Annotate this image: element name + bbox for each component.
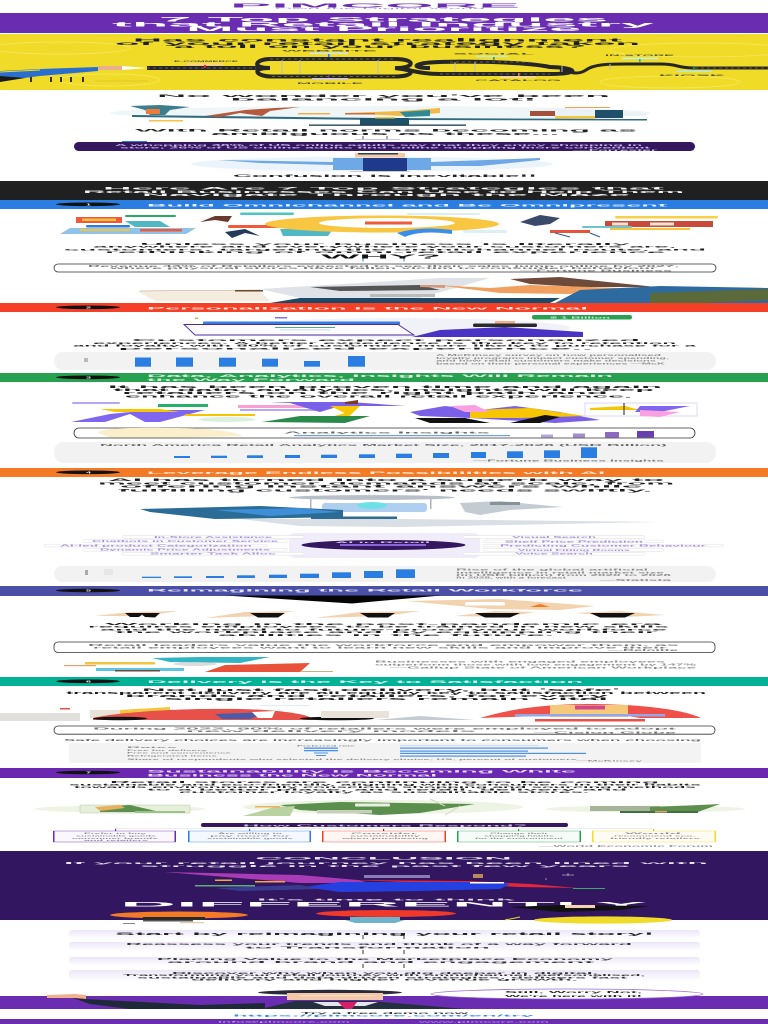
panel: personalization bar chart [54,352,716,370]
text: AI intro: fulfilling customers' needs swiftly. [118,488,652,492]
section header 7: Business the New Normal [147,773,438,777]
illustration: analytics people [71,400,697,423]
card: green [457,829,581,842]
text: personalization intro: personalized experience.. [118,346,595,350]
text: AI intro: AI has turned into a superb way to [108,478,664,482]
illustration: retail workforce [95,596,665,618]
card: red: sustainability [350,834,424,838]
road marker labels: WEBSITE [282,50,384,52]
section header 3 [0,373,768,382]
speech bubble: Still, Worry Not, [505,990,644,994]
title banner [0,13,768,33]
text: personalization intro: experiences. A better experience is the key to retention [93,341,677,345]
panel: delivery preference table: Refrigerated items [127,754,221,758]
text: chart note: A McKinsey survey on how personalised [436,354,664,357]
panel: delivery preference table: Share of respondents who selected the delivery choice, US, percent of customers [127,758,581,761]
text: delivery intro [66,688,706,701]
panel: AI applications list: Smarter Task Alloc [150,553,280,556]
banner: strategies intro: Navigate Through the Maze [142,193,630,197]
heading: conclusion: CONCLUSION [255,857,516,861]
panel: AI applications list: In-Store Assistance [154,536,276,539]
text: workforce intro: requires employees to be trained in new skills [88,625,672,629]
panel: AI applications list: AI-led product Categorization [60,544,255,548]
footer bar [0,1019,768,1024]
callout: why stat box: where physical stores have fallen victim to consumer behaviour [110,267,657,270]
road marker labels: CATALOG [475,79,565,82]
text: chart note: loyalty programs impact customer spending, [436,357,671,360]
heading: balancing a lot: balancing a lot! [230,98,537,102]
text: ambiguous norms [135,128,637,140]
panel: AI applications list: AI in Retail [335,541,433,544]
step 4 text: delivery and higher revenue growth. [191,978,581,982]
panel: delivery preference table [69,743,701,763]
illustration: laptop and person [137,277,768,303]
step 2 text: to Transformation [245,945,494,949]
road chart [147,59,768,76]
source: WEF: —World Economic Forum [539,844,717,848]
callout: workforce stat box: retail employees want to learn new skills and improve their [93,646,667,650]
text: sustainability intro: to a better place, and retail, delivery and [147,787,630,791]
callout: delivery stat box: new delivery models [186,730,483,733]
callout: Forrester stat pill [74,141,695,152]
card: yellow [592,829,716,842]
text: omnichannel intro: Unless your business is literally [140,242,633,246]
heading: think differently [120,898,656,908]
text: sustainability intro: Retail stores are continuing to be coming [110,780,663,784]
illustration: employee collage [64,657,333,672]
illustration: delivery car and person [0,704,701,722]
illustration: figures lower edge [123,920,405,924]
text: workforce intro [88,622,672,637]
card: red [322,829,446,842]
heading: think differently: DIFFERENTLY [120,901,656,908]
text: confusion: Confusion is inevitable!! [233,174,537,178]
panel: AI applications list: Voice Search [515,554,596,556]
card: blue: Are willing to [218,832,285,835]
section header 6 [0,677,768,686]
panel: delivery preference table: Rates [127,746,183,749]
text: AI chart note [456,568,675,582]
section header 1: 1 [86,202,92,206]
speech bubble [431,989,703,999]
card: purple: Prefer to buy [84,832,150,835]
heading: WHY: WHY? [321,254,441,260]
text: workforce intro: and the need to future-proof your workforce [100,627,670,631]
section header 3: 3 [86,376,92,380]
callout: analytics box [74,428,695,438]
text: personalization intro: and loyalty, with 80% of customers more likely to purchase for a [73,344,698,348]
step 3 text: around brand and engagement [167,960,596,964]
card: red: Consider [351,833,418,835]
stat cards [53,829,716,842]
step 3 text: Placing Value to the Marketplace Economy [157,957,618,961]
logo [230,4,528,10]
illustration: AI platform and robot [140,495,660,527]
callout: why stat box: Revenue 43% of Retailers expected to see their sales jump online by 2027, [88,265,681,268]
text: sustainability intro: sustainable and eco-friendly, aligning with consumers in their habits [69,782,705,786]
heading: realignment question: a toll on your business? [174,44,589,49]
panel: AI applications list: Shelf Price Prediction [505,540,646,543]
text: workforce intro: the workplace and by equipping their [115,630,665,634]
heading: realignment question: Has constant realignment [133,38,627,42]
title banner: Must Prioritize [186,27,587,33]
section header 7: 7 [86,771,92,775]
text: sustainability intro: customer loyalty as sustainable stores. [179,790,591,794]
text: free demo call to action: Try a free demo now [301,1012,469,1015]
title banner: that Retail Industry [112,22,661,28]
illustration: personalization laptop: $ 1 Billion [550,317,613,320]
callout: why stat box: —Fortune Business [520,270,676,272]
heading: realignment question [115,38,643,49]
text: chart note [436,354,671,366]
callout: workforce stat box: Retail leaders value the workforce and empower them, as [88,644,684,647]
step 3 text [157,957,618,964]
section header 3: the Way Forward [147,378,355,382]
callout: delivery stat box: During 2022, 90% of retailers were employed to adopt [93,727,677,730]
text: analytics intro: that data, analytics, insights will keep [113,388,654,392]
text: AI intro: meet customer demands at scale, from [98,482,674,486]
panel: AI applications list: Predicting Customer Behaviour [500,544,707,548]
heading pill: how customers respond [115,823,652,828]
text: workforce source: Businesses with engaged employees [375,660,668,664]
text: analytics intro: retailers on the right path and [122,391,608,395]
panel: retail strategy road on yellow [0,34,768,90]
footer band with manager [0,990,768,1009]
callout: why stat box [54,264,716,272]
panel: delivery preference table: Preferred rate [297,744,358,748]
section header 7: Sustainability is Becoming White [147,770,577,774]
text: personalization intro: Customers expect personalized [132,338,642,342]
text: AI intro: offering instant answers while [120,485,643,489]
section header 1: Build Omnichannel and Be Omnipresent [147,204,672,208]
card: red: when purchasing [342,838,431,840]
card: green: Change their [490,832,549,835]
text: sustainability intro [69,780,705,794]
card: yellow: recommend eco- [614,836,697,838]
logo: PIMCORE [230,4,528,10]
text: AI chart note: in 2028, with a forecast [456,576,567,580]
road marker labels: KIOSK [659,75,731,77]
section header 1 [0,200,768,209]
illustration: balancing people [110,105,650,126]
card: purple: sustainable goods [76,834,159,838]
callout: workforce stat box [54,642,715,652]
callout: delivery stat box [54,726,715,735]
heading: realignment question: of your retail strategy taken [115,41,643,46]
panel: retail analytics market chart [54,442,716,463]
panel: AI market chart [54,566,716,582]
card: purple: consumer brands [72,838,162,840]
text: chart note: based on their personal experiences —McK [436,362,666,366]
text: analytics intro: It has been proven time and again [108,385,662,389]
step 4 text: sustainable and data-driven strategies, delivers fast [137,976,629,979]
callout: Forrester stat pill: store; 26% of US online adults find online shopping more convenient [120,146,651,150]
heading: think differently: It's time to think [257,898,520,902]
text: workforce source [375,660,699,670]
panel: conclusion [0,851,768,924]
section header 2 [0,303,768,312]
text: AI chart note: —Statista [600,579,675,582]
card: blue: pay more for [210,836,291,838]
banner: strategies intro [0,181,768,200]
footer bar: info@pimcore.com [218,1021,352,1023]
text: workforce source: outperform those with low engagement by 147% [375,662,699,666]
text: workforce intro: abilities in the future. [218,633,556,637]
callout: delivery stat box: —Cision Globe [534,732,681,735]
card: yellow: friendly retailers [610,837,704,840]
text: free demo call to action [233,1012,541,1018]
illustration: flying figure [164,872,605,892]
step 4 text [123,972,647,982]
text: AI chart note: (in USD billion) from 2020 to 2028 [456,574,675,577]
card: yellow: Would [625,833,686,835]
text: delivery consumers: Safe delivery choices are increasingly important to consumers when choosing [64,738,703,742]
speech bubble: We're here with it! [505,994,643,998]
text: omnichannel intro: anywhere and everywhere your customers are, [93,244,677,248]
text: AI intro [98,478,674,492]
callout: Forrester stat pill: A whopping 38% of US online adults say that they enjoy shopping in [115,144,646,147]
hand holding pen [0,66,148,82]
text: omnichannel intro: rethinking of omni-retail experience [105,250,668,254]
heading: conclusion: struggle in the past few years [140,864,634,868]
road marker labels: SOCIAL [453,52,542,56]
text: ambiguous norms: With Retail norms becoming as [135,128,637,132]
card: purple [53,829,176,842]
panel: delivery preference table: Free and convenience [127,752,235,754]
heading: balancing a lot: No wonder you've been [157,94,617,98]
illustration: shrugging person [191,153,553,172]
road marker labels: IN-STORE [605,55,679,57]
section header 5: 5 [86,589,92,593]
text: chart note: and how retail customers make decisions [436,360,659,362]
road marker labels: MOBILE [297,83,369,85]
heading: WHY [321,254,441,262]
text: delivery intro: Not just fast delivery, but 'safe' [142,688,622,692]
section header 4: 4 [86,470,92,474]
road marker labels: E-COMMERCE [174,61,241,63]
section header 2: 2 [86,306,92,310]
callout: workforce stat box: —Deloitte [608,649,682,652]
illustration: sustainability scenes [34,799,745,816]
step 1 text: Start by reimagining your retail story! [115,932,654,936]
panel: AI applications list: Dynamic Price Adjustments [100,549,274,552]
text: personalization intro [73,338,698,350]
section header 2: Personalization is the New Normal [147,306,588,310]
illustration: omnichannel gear [60,212,718,238]
heading pill: how customers respond: How Customers Respond? [243,823,530,827]
section header 3: Data, Analytics, Insights Will Remain [147,374,613,378]
panel: retail analytics market chart: North America Retail Analytics Market Size, 2017-2028 (USD Billion) [100,444,668,447]
heading: conclusion: If your retail journey has been lined with [64,861,710,865]
illustration: personalization laptop [184,315,632,338]
section header 5 [0,586,768,596]
step 4 text: Discover why when you dig deeper in digital, [172,972,601,975]
callout: analytics box: Analytics Insights [284,430,495,434]
panel: AI applications list: Chatbots in Customer Service [92,540,282,543]
banner: strategies intro: Here Are 7 Top Strategies that [103,186,672,190]
text: AI chart note: intelligence in retail market size [456,571,668,574]
banner: strategies intro: Retail Businesses Can Use to Help Them [83,190,689,194]
text: workforce source: —Gallup State of American Workplace [390,666,699,670]
card: purple: and retailers [84,839,152,842]
panel: delivery preference table: —McKinsey [576,760,646,762]
text: delivery intro: brands and retailers, for every [125,694,610,698]
footer bar: www.pimcore.com [419,1021,551,1023]
text: analytics intro: enhance the overall retail experience. [125,394,633,398]
step 2 text [126,942,635,949]
heading: balancing a lot [157,94,617,102]
logo: Own the Digital World [275,7,493,10]
text: delivery intro: transparent delivery are all equally key to satisfaction between [66,691,706,695]
card: green: shopping habits [484,834,557,838]
card: blue: sustainable goods [207,837,296,840]
heading: conclusion [64,857,710,868]
text: analytics intro [108,385,662,398]
illustration: three figures [110,905,672,924]
section header 6: 6 [86,680,92,684]
card: blue [188,829,311,842]
card: green: for the environment [475,837,564,840]
panel: delivery preference table: Free for delivery [127,750,211,752]
step 2 text: Reassess your trends and think of a way forward [126,942,635,946]
panel: AI applications list [44,533,723,558]
text: AI chart note: Rise of the global artificial [456,568,650,572]
text: ambiguous norms: ambiguous as these... [211,132,559,136]
callout: Forrester stat pill: —Forrester [573,149,657,152]
road marker labels [174,50,731,85]
panel: AI applications list: Virtual Fitting Rooms [518,549,633,552]
panel: AI applications list: Visual Search [512,537,599,539]
section header 5: Reimagining the Retail Workforce [147,588,583,592]
section header 6: Delivery is the Key to Satisfaction [147,680,588,684]
text: sustainability intro: towards environmentally conscious shopping and sourcing methods [74,785,700,789]
title banner: 7 Top Strategies [159,18,614,24]
text: workforce intro: Working in the post-pandemic era [105,622,666,626]
section header 4 [0,468,768,477]
text: delivery intro: single retailers remain vital [164,697,609,701]
text: free demo call to action: https://pimcore.com/en/try [233,1014,541,1018]
panel: next steps [69,930,700,982]
text: omnichannel intro: customers, targeting the omnichannel route, and [64,247,707,251]
section header 4: Leverage Endless Possibilities with AI [147,471,605,475]
step 4 text: Transforming your retail journey with omnichannel, personalised, [123,974,647,977]
text: omnichannel intro [64,242,707,254]
section header 7 [0,768,768,778]
panel: retail analytics market chart: —Fortune Business Insights [473,460,668,462]
